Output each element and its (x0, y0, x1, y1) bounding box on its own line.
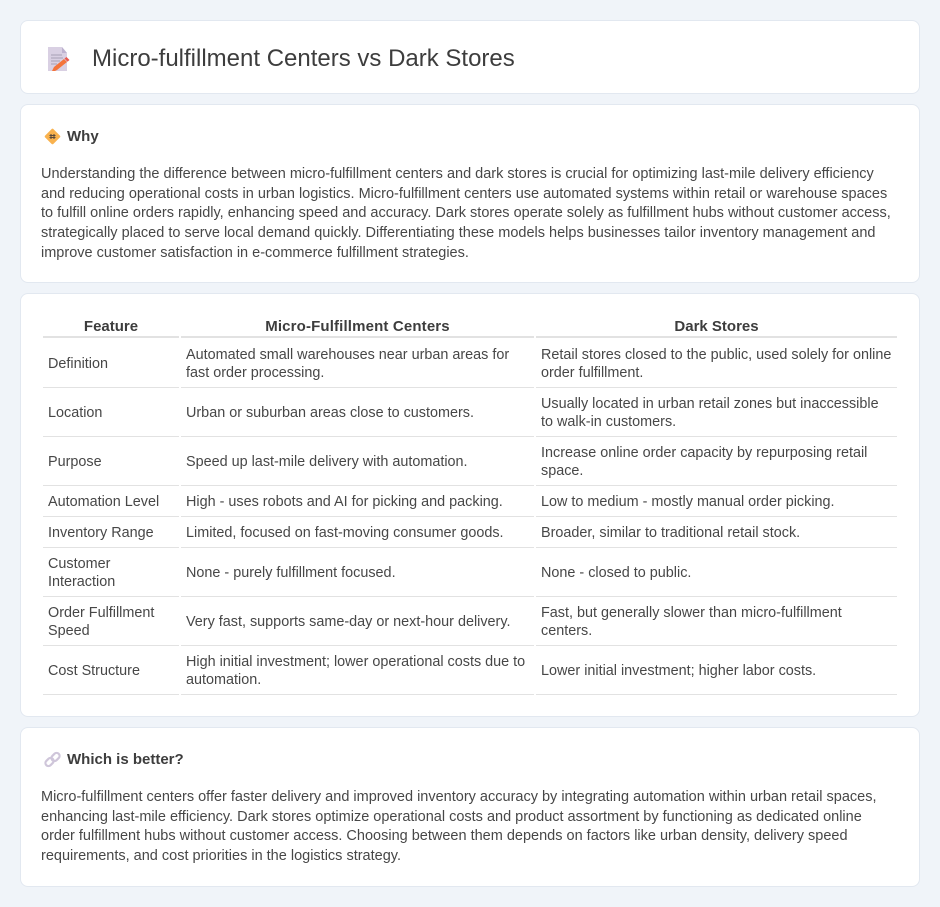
table: feature comparison: High - uses robots and AI for picking and packing. (186, 494, 503, 510)
table: feature comparison: Automation Level (48, 494, 159, 510)
table: feature comparison: automation. (186, 672, 261, 688)
table: feature comparison: Urban or suburban areas close to customers. (186, 405, 474, 421)
table: feature comparison: High initial investment; lower operational costs due to (186, 654, 525, 670)
heading: why: Why (67, 128, 99, 145)
table: feature comparison: Speed up last-mile delivery with automation. (186, 454, 468, 470)
text block: why explanation: and reducing operational costs in urban logistics. Micro-fulfillment centers use automated systems within retail or warehouse spaces (41, 186, 887, 202)
table: feature comparison (43, 318, 897, 695)
text block: why explanation: to fulfill online orders rapidly, enhancing speed and accuracy. Dark stores operate solely as fulfillment hubs without customer access, (41, 205, 891, 221)
table: feature comparison: None - purely fulfillment focused. (186, 565, 396, 581)
table: feature comparison: Limited, focused on fast-moving consumer goods. (186, 525, 504, 541)
table: feature comparison: Feature (84, 318, 138, 335)
table: feature comparison: Low to medium - mostly manual order picking. (541, 494, 835, 510)
table: feature comparison: Cost Structure (48, 663, 140, 679)
icon: chain link (44, 752, 61, 768)
text block: verdict (41, 789, 876, 864)
icon: diamond sign (44, 128, 60, 144)
table: feature comparison: to walk-in customers. (541, 414, 676, 430)
table: feature comparison: Very fast, supports same-day or next-hour delivery. (186, 614, 510, 630)
text block: why explanation: strategically placed to serve local demand quickly. Differentiating these models helps businesses tailor inventory management and (41, 225, 875, 241)
table: feature comparison: Definition (48, 356, 108, 372)
panel: why (20, 104, 920, 283)
text block: why explanation: Understanding the difference between micro-fulfillment centers and dark stores is crucial for optimizing last-mile delivery efficiency (41, 166, 874, 182)
table: feature comparison: Interaction (48, 574, 115, 590)
table: feature comparison: order fulfillment. (541, 364, 643, 380)
table: feature comparison: Broader, similar to traditional retail stock. (541, 525, 800, 541)
table: feature comparison: Retail stores closed to the public, used solely for online (541, 346, 891, 362)
text block: verdict: enhancing last-mile efficiency. Dark stores optimize operational costs and product assortment by functioning as dedicated online (41, 809, 862, 825)
table: feature comparison: Lower initial investment; higher labor costs. (541, 663, 816, 679)
table: feature comparison: Speed (48, 623, 90, 639)
panel: which is better (20, 727, 920, 887)
text block: verdict: order fulfillment hubs without customer access. Choosing between them depends on factors like urban density, delivery speed (41, 828, 848, 844)
table: feature comparison: space. (541, 463, 583, 479)
table: feature comparison: None - closed to public. (541, 565, 691, 581)
table: feature comparison: Dark Stores (674, 318, 759, 335)
icon: document with pencil (48, 47, 70, 71)
text block: verdict: Micro-fulfillment centers offer faster delivery and improved inventory accuracy by integrating automation within urban retail spaces, (41, 789, 876, 805)
table: feature comparison: Micro-Fulfillment Centers (265, 318, 450, 335)
text block: verdict: requirements, and cost priorities in the logistics strategy. (41, 848, 401, 864)
title: Micro-fulfillment Centers vs Dark Stores (92, 45, 515, 72)
table: feature comparison: centers. (541, 623, 592, 639)
table: feature comparison: Automated small warehouses near urban areas for (186, 346, 509, 362)
panel: comparison table (20, 293, 920, 717)
panel: title header (20, 20, 920, 94)
table: feature comparison: Customer (48, 556, 110, 572)
text block: why explanation (41, 166, 891, 261)
table: feature comparison: Fast, but generally slower than micro-fulfillment (541, 605, 842, 621)
table: feature comparison: Purpose (48, 454, 102, 470)
table: feature comparison: fast order processing. (186, 364, 324, 380)
table: feature comparison: Usually located in urban retail zones but inaccessible (541, 396, 879, 412)
table: feature comparison: Location (48, 405, 102, 421)
table: feature comparison: Increase online order capacity by repurposing retail (541, 445, 867, 461)
text block: why explanation: improve customer satisfaction in e-commerce fulfillment strategies. (41, 245, 469, 261)
table: feature comparison: Inventory Range (48, 525, 154, 541)
table: feature comparison: Order Fulfillment (48, 605, 154, 621)
heading: which is better: Which is better? (67, 751, 184, 768)
